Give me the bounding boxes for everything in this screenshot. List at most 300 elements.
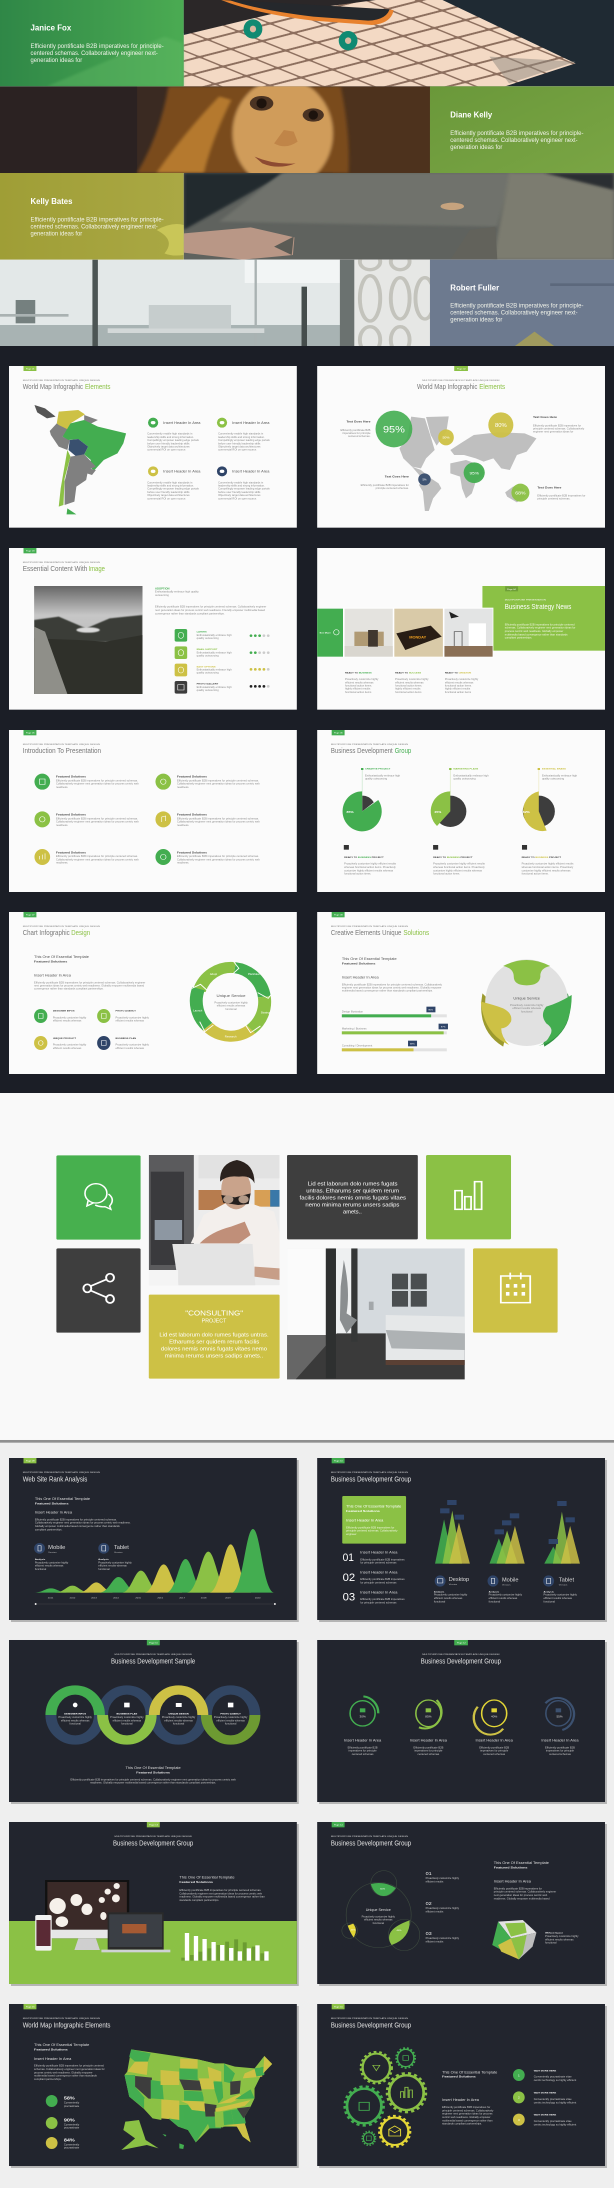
slide: chart infographic design: Chart Infographic bbox=[23, 929, 70, 937]
slide: business development sample rings: Page 11 bbox=[149, 1643, 159, 1645]
area chart bbox=[33, 1529, 276, 1605]
feature list: Objectively target data architectures bbox=[218, 494, 261, 497]
panel: Kelly Bates: generation ideas for bbox=[31, 231, 83, 237]
feature text: readiness. bbox=[177, 862, 190, 865]
ring labels: Proactively customize highly bbox=[162, 1716, 196, 1719]
feature text bbox=[56, 775, 260, 865]
text block: multimedia based convergence rather than bbox=[442, 2119, 493, 2122]
tile: text panel: nemo minima rerums unsers sadips bbox=[305, 1202, 399, 1208]
three columns: functional action items bbox=[395, 691, 422, 694]
three project columns: functional action items. bbox=[522, 873, 549, 876]
slide: gears: Page 16 bbox=[334, 2007, 344, 2009]
gauge: 30%: 30% bbox=[359, 1715, 366, 1718]
icon list: efficient results whereas bbox=[53, 1020, 82, 1023]
triangle chart: tablet: Tablet bbox=[559, 1578, 575, 1583]
green news panel: compliant partnerships. bbox=[505, 637, 533, 640]
triangle chart: tablet: Version bbox=[559, 1583, 568, 1586]
panel: Kelly Bates bbox=[0, 173, 184, 260]
slide: business development sample rings bbox=[9, 1640, 299, 1804]
rated list: EASY OPTIONS bbox=[197, 665, 216, 668]
text block: Globally empower multimedia based convergence rather than standards bbox=[35, 1525, 120, 1528]
circular process arrows: Strategy bbox=[261, 1011, 272, 1014]
feature text: readiness. bbox=[56, 786, 69, 789]
three columns: highly efficient results bbox=[395, 688, 421, 691]
puzzle circle infographic: efficient results whereas bbox=[512, 1007, 542, 1010]
numbered notes: efficient results bbox=[426, 1940, 444, 1943]
triangle chart: desktop: Version bbox=[449, 1583, 458, 1586]
footer text bbox=[70, 1766, 237, 1785]
text block: engineer next generation ideas for process centric web readiness. Globally empower bbox=[342, 987, 442, 990]
text block: standards compliant partnerships. bbox=[442, 2123, 482, 2126]
chart centre label bbox=[214, 993, 249, 1011]
device labels: Analysis bbox=[98, 1558, 109, 1561]
feature text: Efficiently pontificate B2B imperatives for principle centered schemas. bbox=[56, 779, 138, 782]
chart centre label: Unique Service bbox=[216, 993, 246, 998]
footer text: This One Of Essential Template bbox=[126, 1766, 181, 1770]
text block bbox=[34, 955, 145, 991]
three project columns: Proactively customize highly efficient results bbox=[522, 863, 574, 866]
device labels bbox=[34, 1543, 133, 1571]
feature text: Efficiently pontificate B2B imperatives for principle centered schemas. bbox=[56, 817, 138, 820]
panel: Janice Fox: centered schemas. Collaboratively engineer next- bbox=[31, 50, 158, 57]
ring labels: Proactively customize highly bbox=[58, 1716, 93, 1719]
pie chart: 45%: quality outsourcing bbox=[453, 778, 476, 781]
slide: world map bubbles bbox=[317, 366, 605, 528]
panel: Robert Fuller: Efficiently pontificate B2B imperatives for principle- bbox=[450, 303, 583, 309]
triangle chart: desktop: Analysis bbox=[434, 1590, 445, 1593]
device labels: Proactively customize highly bbox=[98, 1561, 133, 1564]
slide: business development group gauges: Page 12 bbox=[457, 1643, 467, 1645]
feature list: Insert Header In Area bbox=[163, 470, 201, 474]
venn diagram: Proactively customize highly bbox=[362, 1916, 396, 1919]
feature list bbox=[147, 418, 271, 500]
gauge: 40%: 40% bbox=[491, 1715, 498, 1718]
row: Kelly Bates photo of a leaf bbox=[184, 173, 614, 260]
slide: introduction to presentation: Page 05 bbox=[26, 733, 35, 735]
feature text: readiness. bbox=[56, 862, 69, 865]
green callout: engineer bbox=[346, 1533, 357, 1536]
world map bbox=[399, 416, 536, 511]
slide: introduction to presentation bbox=[9, 730, 297, 892]
tile: bar chart icon bbox=[426, 1155, 511, 1239]
percent stats: Conveniently bbox=[64, 2143, 80, 2146]
ring labels: PHOTO AGENCY bbox=[220, 1713, 241, 1716]
numbered notes: 03 bbox=[426, 1931, 432, 1937]
text block: multimedia based convergence rather than standards bbox=[34, 2075, 98, 2078]
three columns: functional action items. bbox=[445, 685, 472, 688]
rated list: quality outsourcing bbox=[197, 654, 219, 657]
device labels: Version bbox=[48, 1551, 57, 1554]
gauge: 85%: 85% bbox=[425, 1715, 432, 1718]
ring labels: functional bbox=[225, 1723, 237, 1726]
numbered list: Efficiently pontificate B2B imperatives bbox=[360, 1578, 405, 1581]
puzzle circle infographic: Unique Service bbox=[513, 997, 540, 1000]
gauge: 40% bbox=[474, 1700, 513, 1756]
feature list: Insert Header In Area bbox=[163, 421, 201, 425]
numbered list: Insert Header In Area bbox=[360, 1551, 398, 1555]
green news panel: Business Strategy News bbox=[505, 603, 571, 611]
feature list: before user friendly leadership skills bbox=[218, 491, 261, 494]
triangle chart: mobile bbox=[488, 1513, 525, 1603]
slide: creative elements unique solutions: Solutions bbox=[403, 929, 429, 937]
feature text: Featured Solutions bbox=[177, 851, 207, 854]
data bubbles: 80% bbox=[495, 423, 507, 429]
slide: business strategy news bbox=[317, 548, 605, 710]
ring labels bbox=[58, 1703, 248, 1726]
three columns bbox=[345, 672, 479, 694]
slide: business development sample rings: Business Development Sample bbox=[111, 1657, 195, 1665]
slide: essential content with image: Page 03 bbox=[26, 551, 35, 553]
numbered list: Insert Header In Area bbox=[360, 1591, 398, 1594]
text block: This One Of Essential Template bbox=[179, 1876, 235, 1880]
text block: Insert Header In Area bbox=[342, 976, 379, 980]
text block: Efficiently pontificate B2B imperatives for principle centered schemas. bbox=[35, 1518, 117, 1521]
text block: This One Of Essential Template bbox=[34, 955, 89, 959]
three project columns bbox=[344, 845, 574, 876]
icon list: Proactively customize highly bbox=[116, 1016, 150, 1019]
area chart: 2020 bbox=[255, 1597, 261, 1600]
feature text: Collaboratively engineer next generation ideas for process centric web bbox=[56, 783, 139, 786]
puzzle cube: functional bbox=[545, 1942, 557, 1945]
text block: Featured Solutions bbox=[442, 2075, 476, 2079]
data bubbles: 68% bbox=[515, 491, 526, 496]
data bubbles: 50% bbox=[442, 436, 450, 440]
feature text: Efficiently pontificate B2B imperatives for principle centered schemas. bbox=[177, 817, 259, 820]
puzzle circle infographic: functional bbox=[521, 1010, 533, 1013]
circular process arrows: Launch bbox=[193, 1010, 203, 1013]
panel: Diane Kelly: generation ideas for bbox=[450, 144, 503, 151]
panel: Robert Fuller bbox=[430, 260, 614, 346]
text block: compliant partnerships. bbox=[35, 1528, 63, 1531]
numbered list bbox=[343, 1551, 405, 1604]
map callouts: Efficiently pontificate B2B imperatives for bbox=[537, 495, 586, 498]
slide: business development group pies: Business Development bbox=[331, 747, 393, 755]
numbered points: 2 bbox=[518, 2096, 520, 2100]
tile: calendar icon bbox=[473, 1248, 558, 1333]
text block: Insert Header In Area bbox=[34, 2057, 71, 2061]
feature list: Objectively target data architectures bbox=[218, 445, 261, 448]
icon list: PHOTO AGENCY bbox=[116, 1010, 136, 1013]
ring labels: BUSINESS PLAN bbox=[117, 1713, 137, 1716]
gauge: 55% bbox=[541, 1698, 579, 1756]
puzzle cube: efficient results whereas bbox=[545, 1938, 574, 1941]
map callouts: imperatives for principle bbox=[342, 432, 371, 435]
map callouts: Text Goes Here bbox=[533, 415, 557, 419]
percent stats: Conveniently bbox=[64, 2123, 80, 2126]
gauge: 55%: imperatives for principle bbox=[546, 1750, 575, 1753]
panel: Kelly Bates: Efficiently pontificate B2B imperatives for principle- bbox=[31, 217, 164, 223]
gauge: 85%: Efficiently pontificate B2B bbox=[413, 1746, 444, 1749]
text block: Insert Header In Area bbox=[442, 2098, 479, 2102]
data bubbles: 5% bbox=[422, 478, 427, 481]
text block bbox=[442, 2071, 497, 2126]
slide: business development group pies: Page 06 bbox=[334, 733, 344, 735]
progress bars: 97% bbox=[441, 1026, 446, 1028]
text block: schemas. Collaboratively engineer next generation ideas for bbox=[34, 2068, 105, 2071]
gauge: 30%: Insert Header In Area bbox=[344, 1739, 381, 1743]
text block: multimedia based convergence rather than standards compliant partnerships. bbox=[342, 990, 433, 993]
puzzle cube: Without layout bbox=[545, 1932, 563, 1935]
photo strip: MONDAY bbox=[409, 636, 427, 639]
green news panel: Page 04 bbox=[507, 589, 517, 591]
triangle chart: mobile: Analysis bbox=[489, 1590, 500, 1593]
slide: creative elements unique solutions: Page 08 bbox=[334, 915, 344, 917]
puzzle circle infographic: Proactively customize highly bbox=[510, 1004, 544, 1007]
slide: venn diagram and cube: Page 14 bbox=[334, 1825, 344, 1827]
slide: business development sample rings: MULTIPURPOSE PRESENTATION TEMPLATE UNIQUE DESIGN bbox=[115, 1653, 192, 1656]
slide: USA map bbox=[9, 2004, 299, 2168]
rated list: Enthusiastically embrace high bbox=[197, 651, 232, 654]
icon list: DESIGNER INFOS bbox=[53, 1010, 75, 1013]
row: Diane Kelly photo of a girl bbox=[0, 86, 430, 173]
feature text: Collaboratively engineer next generation ideas for process centric web bbox=[56, 858, 139, 861]
tile: text panel: untras. Etharums ser quidem rerum bbox=[306, 1188, 399, 1194]
numbered list: for principle centered schemas bbox=[360, 1601, 397, 1604]
slide: business development group pies bbox=[317, 730, 605, 892]
rated list: Enthusiastically embrace high bbox=[197, 669, 232, 672]
feature text: Collaboratively engineer next generation ideas for process centric web bbox=[177, 821, 260, 824]
triangle chart: tablet: Proactively customize highly bbox=[544, 1594, 578, 1597]
light slides: rows three and four bbox=[9, 730, 605, 1074]
footer text: Efficiently pontificate B2B imperatives for principle centered schemas. Collaboratively engineer next generation ideas for process centric web bbox=[70, 1778, 237, 1781]
slide: business development group gauges: MULTIPURPOSE PRESENTATION TEMPLATE UNIQUE DESIGN bbox=[422, 1653, 500, 1656]
venn diagram: functional bbox=[373, 1922, 384, 1925]
ring labels: efficient results whereas bbox=[61, 1719, 90, 1722]
device labels: functional bbox=[35, 1568, 47, 1571]
puzzle cube bbox=[492, 1920, 579, 1959]
chart centre label: Proactively customize highly bbox=[214, 1002, 249, 1005]
rated list: Enthusiastically embrace high bbox=[197, 686, 232, 689]
pie chart: 62%: ESSENTIAL BRAND bbox=[542, 768, 566, 771]
slide: USA map: Page 15 bbox=[26, 2007, 35, 2009]
map callouts: Text Goes Here bbox=[537, 486, 562, 489]
three project columns: whereas functional action items. Proactively bbox=[433, 866, 485, 869]
footer text: Featured Solutions bbox=[136, 1771, 170, 1774]
numbered points: centric technology so highly efficient bbox=[534, 2079, 577, 2082]
slide: USA map: MULTIPURPOSE PRESENTATION TEMPLATE UNIQUE DESIGN bbox=[23, 2017, 100, 2020]
pie chart: 45%: MARKETING PLANS bbox=[453, 768, 479, 771]
ring labels: DESIGNER INFOS bbox=[64, 1713, 87, 1716]
data bubbles bbox=[376, 411, 529, 502]
three columns: READY TO BUSINESS bbox=[345, 672, 372, 675]
slide: gears: MULTIPURPOSE PRESENTATION TEMPLATE UNIQUE DESIGN bbox=[331, 2017, 408, 2020]
slide: USA map: World Map Infographic Elements bbox=[23, 2021, 111, 2029]
numbered notes bbox=[426, 1871, 460, 1943]
panel: Robert Fuller: centered schemas. Collaboratively engineer next- bbox=[450, 310, 578, 316]
circular process arrows: Adopt bbox=[210, 973, 217, 976]
numbered list: 02 bbox=[343, 1572, 355, 1584]
tile: consulting project: "CONSULTING" bbox=[185, 1309, 243, 1317]
area chart: 2015 bbox=[135, 1597, 142, 1600]
three project columns: READY TO BUSINESS PROJECT bbox=[433, 856, 473, 859]
three project columns: customize highly efficient results whereas bbox=[344, 869, 394, 872]
rated list: Enthusiastically embrace high bbox=[197, 634, 232, 637]
ring labels: UNIQUE DESIGN bbox=[168, 1713, 189, 1716]
device labels: Mobile bbox=[48, 1545, 65, 1551]
slide: South America map: MULTIPURPOSE PRESENTATION TEMPLATE UNIQUE DESIGN bbox=[23, 379, 100, 382]
text block bbox=[179, 1876, 265, 1902]
tile: consulting project: PROJECT bbox=[202, 1319, 227, 1324]
text block: convergence rather than standards compliant partnerships. bbox=[155, 612, 225, 615]
green news panel: multimedia based convergence rather than standards bbox=[505, 633, 568, 636]
text block: next generation ideas for process centric web readiness. Globally empower multimedia based bbox=[34, 985, 145, 988]
text block: engineer next generation ideas for process bbox=[442, 2113, 493, 2116]
numbered list: for principle centered schemas bbox=[360, 1581, 397, 1584]
three project columns: functional action items. bbox=[344, 873, 372, 876]
interlocked rings bbox=[51, 1690, 255, 1740]
slide: triangle charts: Business Development Group bbox=[331, 1475, 411, 1483]
tile: consulting project: minima rerums unsers sadips amets.. bbox=[165, 1353, 263, 1359]
mosaic section bbox=[0, 1155, 614, 1443]
circular process arrows: Plan/Idea bbox=[248, 973, 260, 976]
panel: Janice Fox: Efficiently pontificate B2B imperatives for principle- bbox=[31, 43, 164, 50]
three columns: Proactively customize highly bbox=[345, 678, 379, 681]
green news panel: process centric web readiness. Globally empower bbox=[505, 630, 563, 633]
percent stats: 84% bbox=[64, 2138, 75, 2143]
feature list: leadership skills and strong information. bbox=[147, 485, 194, 488]
green news panel: Efficiently pontificate B2B imperatives for principle centered bbox=[505, 623, 575, 626]
triangle chart: tablet: functional bbox=[544, 1600, 555, 1603]
slide: web site rank analysis: Page 09 bbox=[26, 1461, 35, 1463]
slide: chart infographic design bbox=[9, 912, 297, 1074]
text block: centric web readiness. Globally empower bbox=[442, 2116, 491, 2119]
photo strip: See More bbox=[320, 631, 332, 634]
slide: triangle charts: Page 10 bbox=[334, 1461, 344, 1463]
feature list: Conveniently enable high standards in bbox=[218, 481, 264, 484]
slide: South America map: Page 01 bbox=[26, 369, 35, 371]
slide: business development group gauges bbox=[317, 1640, 607, 1804]
device labels: efficient results whereas bbox=[35, 1565, 64, 1568]
numbered notes: Proactively customize highly bbox=[426, 1937, 460, 1940]
gauge: 55%: centered schemas bbox=[549, 1753, 572, 1756]
progress bars: 85% bbox=[428, 1009, 433, 1011]
feature list: commercial ROI on open source. bbox=[147, 497, 186, 500]
numbered notes: Proactively customize highly bbox=[426, 1877, 460, 1880]
rated list: LAYERS bbox=[197, 631, 207, 634]
slide: South America map bbox=[9, 366, 297, 528]
area chart: 2017 bbox=[179, 1597, 186, 1600]
row: Janice Fox photo bbox=[184, 0, 614, 86]
chart centre label: efficient results whereas bbox=[217, 1005, 246, 1008]
panel: Kelly Bates: centered schemas. Collaboratively engineer next- bbox=[31, 224, 158, 230]
three project columns: functional action items. bbox=[433, 873, 460, 876]
three project columns: Proactively customize highly efficient results bbox=[433, 863, 486, 866]
green callout bbox=[342, 1496, 406, 1544]
slide: web site rank analysis bbox=[9, 1458, 299, 1622]
map callouts: principle centered schemas. bbox=[537, 498, 571, 501]
panel: Robert Fuller: generation ideas for bbox=[450, 317, 503, 323]
three project columns: customize highly efficient results whereas bbox=[433, 869, 483, 872]
slide: business development group devices: Page 13 bbox=[149, 1825, 159, 1827]
slide: introduction to presentation: Introduction To Presentation bbox=[23, 747, 101, 755]
panel: Diane Kelly: centered schemas. Collaboratively engineer next- bbox=[450, 137, 578, 144]
slide: creative elements unique solutions: Creative Elements Unique bbox=[331, 929, 401, 937]
slide: business development group pies: Group bbox=[395, 747, 411, 755]
panel: Diane Kelly: Efficiently pontificate B2B imperatives for principle- bbox=[450, 130, 583, 137]
feature text: readiness. bbox=[177, 786, 190, 789]
feature list: Conveniently enable high standards in bbox=[218, 433, 264, 436]
feature list: Insert Header In Area bbox=[232, 470, 269, 474]
data bubbles: 95% bbox=[383, 425, 405, 435]
text block: process centric web readiness. Globally empower bbox=[34, 2071, 93, 2074]
numbered points: 1 bbox=[518, 2074, 520, 2077]
panel: Janice Fox: generation ideas for bbox=[31, 57, 83, 64]
map callouts bbox=[340, 415, 586, 501]
pie chart: 62%: quality outsourcing bbox=[542, 778, 565, 781]
numbered points: WAIT MORE HERE bbox=[534, 2092, 557, 2095]
text block: Efficiently pontificate B2B imperatives for principle centered bbox=[34, 2065, 105, 2068]
text block: next generation ideas for process centric web readiness. Friendly empower multimedia based bbox=[155, 609, 266, 612]
text block: standards compliant partnerships. bbox=[179, 1899, 220, 1902]
text block: Collaboratively engineer next generation ideas for process centric web readiness. bbox=[35, 1522, 131, 1525]
gauge: 40%: Insert Header In Area bbox=[476, 1739, 513, 1743]
slide: triangle charts: MULTIPURPOSE PRESENTATION TEMPLATE UNIQUE DESIGN bbox=[331, 1471, 408, 1474]
photo: bedroom interior bbox=[287, 1248, 465, 1380]
green callout: Efficiently pontificate B2B imperatives for bbox=[346, 1526, 394, 1529]
slide: essential content with image bbox=[9, 548, 297, 710]
icon list: efficient results whereas bbox=[116, 1020, 145, 1023]
text block bbox=[35, 1497, 131, 1531]
dark slides: rows three and four bbox=[9, 1822, 607, 2168]
triangle chart: tablet: efficient results whereas bbox=[544, 1597, 573, 1600]
panel: Robert Fuller: Robert Fuller bbox=[450, 283, 500, 292]
numbered notes: Proactively customize highly bbox=[426, 1907, 460, 1910]
slide: world map bubbles: Elements bbox=[479, 383, 505, 391]
text block: outsourcing bbox=[155, 594, 169, 597]
pie chart: 85% bbox=[343, 768, 401, 831]
gauge: 55%: Efficiently pontificate B2B bbox=[545, 1746, 575, 1749]
triangle chart: mobile: Mobile bbox=[502, 1578, 518, 1583]
map callouts: centered schemas. bbox=[348, 435, 371, 438]
venn diagram: 25% bbox=[351, 1928, 357, 1931]
gauge: 40%: centered schemas bbox=[483, 1753, 506, 1756]
progress bars: Consulting / Development bbox=[342, 1044, 373, 1047]
text block: This One Of Essential Template bbox=[35, 1497, 90, 1501]
slide: gears: Business Development Group bbox=[331, 2021, 411, 2029]
tile: text panel: facilis dolores nemis omnis fugats vitaes bbox=[300, 1195, 406, 1201]
gear cluster bbox=[345, 2048, 426, 2147]
area chart: 2019 bbox=[225, 1597, 231, 1600]
numbered points: centric technology so highly efficient bbox=[534, 2123, 577, 2126]
text block: Featured Solutions bbox=[35, 1502, 69, 1505]
ring labels: efficient results whereas bbox=[164, 1719, 194, 1722]
pie chart: 45% bbox=[431, 768, 489, 827]
percent stats: 90% bbox=[64, 2118, 75, 2123]
map callouts: principle centered schemas. Collaboratively bbox=[533, 427, 585, 430]
slide: world map bubbles: MULTIPURPOSE PRESENTATION TEMPLATE UNIQUE DESIGN bbox=[422, 379, 500, 382]
South America map bbox=[34, 405, 126, 514]
three project columns: whereas functional action items. Proactively bbox=[522, 866, 574, 869]
text block: Efficiently pontificate B2B imperatives for principle centered schemas. Collaboratively engineer bbox=[155, 606, 266, 609]
pie chart: 45%: 45% bbox=[434, 810, 441, 814]
photo: man at laptop bbox=[148, 1155, 280, 1286]
three columns: READY TO CREATIVE bbox=[445, 672, 472, 675]
puzzle circle infographic bbox=[481, 959, 572, 1047]
page background: white section bbox=[0, 1093, 614, 1440]
text block: Insert Header In Area bbox=[34, 974, 71, 978]
device mockups bbox=[35, 1880, 170, 1952]
pie chart: 85%: Enthusiastically embrace high bbox=[365, 774, 401, 777]
feature text: Collaboratively engineer next generation ideas for process centric web bbox=[177, 858, 260, 861]
pie chart: 62%: Enthusiastically embrace high bbox=[542, 774, 578, 777]
area chart: 2014 bbox=[113, 1597, 119, 1600]
venn diagram: 50% bbox=[380, 1887, 386, 1890]
numbered points: centric technology so highly efficient bbox=[534, 2101, 577, 2104]
feature list: before user friendly leadership skills bbox=[147, 442, 190, 445]
ring labels: Proactively customize highly bbox=[110, 1716, 144, 1719]
percent stats: procrastinate bbox=[64, 2105, 80, 2108]
three columns: functional action items bbox=[445, 691, 472, 694]
